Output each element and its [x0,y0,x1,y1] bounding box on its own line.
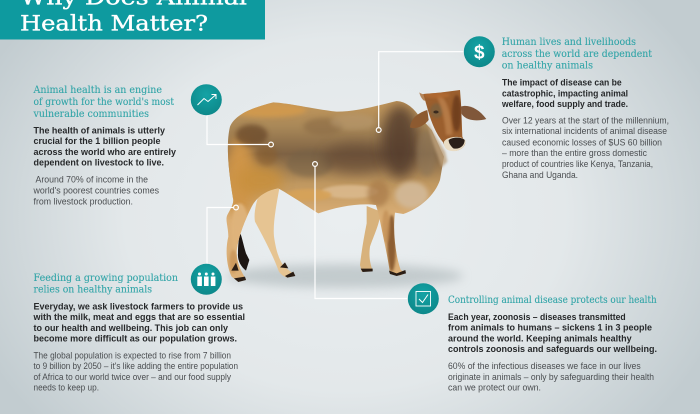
heading: across the world are dependent [502,49,652,60]
cow muzzle [444,137,466,151]
bold text [448,312,657,354]
heading [33,85,174,120]
panel: feeding a growing population [33,264,245,392]
heading: of growth for the world's most [34,97,174,108]
bold text: welfare, food supply and trade. [501,99,628,109]
icon: dollar: $ [474,42,485,64]
heading: Feeding a growing population [34,273,179,284]
heading: on healthy animals [502,60,593,72]
bold text: Everyday, we ask livestock farmers to provide us [34,302,243,312]
heading: Human lives and livelihoods [502,37,636,48]
heading: Controlling animal disease protects our health [448,295,657,306]
bold text: to our health and wellbeing. This job can only [34,323,229,333]
body text: needs to keep up. [34,382,99,392]
icon: people [191,264,222,295]
body text: caused economic losses of $US 60 billion [502,138,662,148]
body text [502,116,669,180]
body text: Over 12 years at the start of the millennium, [502,116,669,126]
cow head [424,90,466,151]
cow tail [238,233,249,271]
panel: human lives and livelihoods [464,36,669,180]
icon: growth arrow [191,84,222,115]
bold text: Each year, zoonosis – diseases transmitted [448,312,626,322]
bold text: across the world who are entirely [34,147,177,157]
icon: checkbox [408,283,439,314]
body text: 60% of the infectious diseases we face in our lives [448,361,641,371]
bold text: The health of animals is utterly [34,126,166,136]
heading [502,37,652,72]
body text [448,361,654,392]
cow neck streaks [427,120,447,167]
body text: Ghana and Uganda. [502,170,578,180]
bold text: from animals to humans – sickens 1 in 3 people [448,322,652,332]
cow ear left [410,110,429,128]
body text: Around 70% of income in the [36,174,148,184]
body text: of Africa to our world twice over – and our food supply [34,372,231,382]
body text: six international incidents of animal disease [502,126,667,136]
bold text: crucial for the 1 billion people [34,136,160,146]
bold text: around the world. Keeping animals healthy [448,334,632,344]
heading: vulnerable communities [33,109,149,120]
bold text: become more difficult as our population grows. [34,334,237,344]
cow hide shading [223,103,437,273]
bold text: with the milk, meat and eggs that are so essential [33,312,245,322]
cow ear right [461,106,486,120]
bold text [501,78,628,109]
title banner: Health Matter? [20,12,208,36]
title banner [0,0,265,40]
bold text: The impact of disease can be [502,78,622,88]
panel: controlling animal disease [408,283,657,392]
body text: world's poorest countries comes [33,186,159,196]
body text [33,174,159,206]
bold text [34,126,177,168]
body text: from livestock production. [34,196,133,206]
cow hooves [231,262,406,282]
body text: can we protect our own. [448,382,541,392]
leader lines from icons to cow [207,52,464,299]
cow far front leg [360,206,381,272]
icon: dollar [464,36,495,67]
cow horn left [419,92,430,101]
bold text: catastrophic, impacting animal [502,88,628,98]
heading: relies on healthy animals [34,284,152,296]
body text: The global population is expected to rise from 7 billion [34,350,231,360]
cow illustration [223,88,486,282]
body text: originate in animals – only by safeguarding their health [448,372,654,382]
body text: to 9 billion by 2050 – it's like adding the entire population [34,361,238,371]
cow eye [433,110,439,113]
cow body [227,101,444,282]
body text: product of countries like Kenya, Tanzania, [502,159,653,169]
bold text: controls zoonosis and safeguards our wellbeing. [448,344,657,354]
heading: Animal health is an engine [33,85,162,96]
bold text: dependent on livestock to live. [34,158,164,168]
body text [34,350,238,392]
body text: – more than the entire gross domestic [502,148,647,158]
heading [34,273,179,296]
bold text [33,302,245,344]
ground shadow under cow [227,264,463,288]
cow far hind leg [255,188,295,277]
panel: engine of growth [33,84,222,206]
